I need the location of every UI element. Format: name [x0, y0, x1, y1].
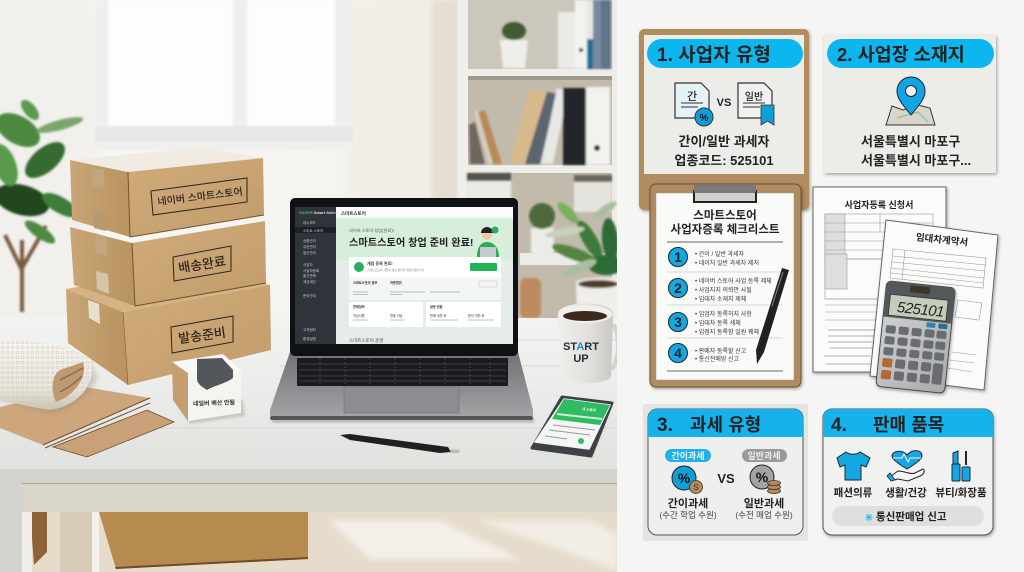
small product box: 네일버 배산 안될 — [193, 398, 235, 408]
bottom section heading: 스마트스토어 운영 — [349, 337, 383, 344]
scene: office desk photo — [0, 0, 624, 572]
START UP mug — [558, 304, 618, 384]
text: address: 서울특별시 마포구 — [861, 134, 960, 149]
label: 배송완료: 배송완료 — [177, 253, 227, 276]
item: fashion — [834, 452, 873, 499]
heading: 4. — [831, 415, 847, 436]
label: 발송준비 — [171, 316, 233, 353]
step 1: • 간이 / 일반 과세자 — [695, 250, 745, 258]
step 4: • 판매자 동록할 신고 — [695, 347, 747, 355]
text: type and code: 업종코드: 525101 — [674, 153, 774, 168]
general tax option: (수전 매업 수원) — [735, 510, 793, 520]
summary cards: 문의 개월 후 — [468, 313, 485, 318]
hero heading: 스마트스토어 창업 준비 완료! — [349, 236, 473, 249]
label: 배송완료 — [173, 246, 231, 281]
smartphone: 내 스토어 — [582, 406, 596, 413]
binders top shelf — [558, 0, 611, 69]
step 1: 1 — [674, 249, 682, 265]
status card: 개업 등록 완료! — [367, 260, 393, 266]
status card — [349, 257, 501, 300]
laptop base — [270, 352, 534, 423]
item: fashion: 패션의류 — [834, 486, 873, 499]
note pill: 통신판매업 신고 — [876, 510, 947, 523]
calculator: 525101 — [896, 299, 945, 321]
step 2 — [668, 277, 772, 303]
panel 3: tax type: VS — [717, 471, 735, 486]
step 3: 3 — [674, 314, 682, 330]
step 3: • 임대차 동록 세체 — [695, 319, 741, 327]
keypad — [881, 318, 948, 385]
general tax option: % — [756, 469, 769, 485]
step 2: • 네이버 스토어 사업 등록 제체 — [695, 277, 772, 285]
icon: pen — [756, 268, 789, 364]
right background — [617, 0, 1024, 572]
heading — [648, 409, 803, 437]
bottom box — [66, 266, 271, 385]
sidebar: 주문관리 — [303, 244, 316, 249]
heading: 3. — [657, 415, 673, 436]
step 4 — [668, 344, 747, 363]
heading pill — [827, 39, 994, 68]
top box — [70, 147, 264, 237]
sidebar: NAVER Smart Seller — [299, 210, 338, 215]
simplified tax option: (수간 학업 수원) — [659, 510, 717, 520]
heading — [823, 409, 993, 437]
general tax option — [735, 449, 793, 520]
flat cardboard sheets — [0, 387, 174, 457]
clip — [694, 185, 756, 202]
step 4: 4 — [674, 345, 682, 361]
heading pill — [647, 39, 803, 68]
summary cards: 허남사항 — [353, 313, 365, 318]
label: 네이버 스마트스토어 — [151, 178, 247, 215]
hero heading — [349, 227, 473, 249]
small plant low shelf — [529, 203, 555, 254]
small product box — [172, 354, 245, 424]
summary cards: 판매정보 — [353, 304, 365, 309]
text: address — [861, 134, 971, 168]
text: type and code: 간이/일반 과세자 — [679, 134, 770, 149]
step 3 — [668, 310, 759, 336]
window — [95, 0, 353, 150]
laptop — [270, 198, 534, 423]
top bar title: 스마트스토어 — [341, 210, 366, 217]
general tax option: 일반과세 — [744, 496, 784, 510]
step 1: • 네이처 일반 과세자 제처 — [695, 259, 759, 267]
icon: tax documents: VS — [717, 97, 731, 109]
item: beauty — [935, 451, 987, 499]
item: beauty: 뷰티/화장품 — [935, 486, 987, 499]
pen on desk — [340, 434, 460, 453]
checklist title — [670, 209, 780, 236]
sidebar: 통신판매 — [303, 273, 316, 278]
step 2: • 임대차 소재지 제체 — [695, 295, 746, 303]
sidebar: 문의관리 — [303, 293, 316, 298]
bubble wrap roll — [0, 340, 97, 413]
step 4: • 통신전매망 신고 — [695, 355, 740, 363]
left plant — [0, 97, 84, 312]
floor — [0, 512, 617, 572]
panel 2: business address — [824, 35, 996, 173]
item: health: 생활/건강 — [885, 486, 927, 499]
heading pill: 2. 사업장 소재지 — [837, 44, 965, 65]
simplified tax option: 간이과세 — [668, 496, 708, 510]
note pill — [832, 506, 984, 526]
summary cards: 활동 현황 — [430, 304, 443, 309]
document: lease contract — [870, 220, 998, 390]
middle box — [70, 221, 266, 306]
sidebar: 상품관리 — [303, 238, 316, 243]
table edge — [0, 469, 617, 483]
character illustration — [477, 226, 499, 258]
step 1 — [668, 248, 759, 267]
sidebar: 스마트 스토어 — [303, 228, 323, 233]
icon: tax documents: % — [700, 113, 709, 124]
status card: 허용범위 — [390, 280, 402, 285]
summary cards: 판매 개월 후 — [430, 313, 447, 318]
box under table — [30, 512, 308, 569]
books middle shelf — [469, 87, 610, 165]
START UP mug: UP — [573, 353, 589, 365]
step 2: • 사업지지 의뢰만 사될 — [695, 286, 752, 294]
note pill: ✳ — [865, 513, 874, 524]
contract table — [890, 249, 986, 372]
label: 네이버 스마트스토어: 네이버 스마트스토어 — [157, 186, 243, 208]
simplified tax option: % — [678, 470, 691, 486]
icon: tax documents: 간 — [687, 90, 697, 103]
general tax option: 일반과세 — [747, 450, 781, 461]
step 2: 2 — [674, 280, 682, 296]
heading: 과세 유형 — [690, 415, 761, 435]
back wall and curtains — [0, 0, 617, 572]
icon: tax documents: 일반 — [745, 90, 763, 103]
simplified tax option: 간이과세 — [671, 450, 705, 461]
form table — [825, 214, 933, 320]
item: health — [885, 451, 927, 499]
sidebar: 세금계산 — [303, 279, 317, 284]
document: business registration form — [813, 187, 946, 372]
step 3: • 입업자 동록허지 사항 — [695, 310, 752, 318]
panel 3: tax type — [643, 404, 808, 541]
smartphone — [532, 397, 612, 457]
panel 1: business type — [639, 29, 809, 210]
START UP mug: START — [563, 341, 599, 353]
icon: tax documents — [675, 83, 774, 126]
icon: map pin — [886, 77, 935, 125]
potted plant on top shelf — [500, 22, 528, 68]
right plant — [545, 199, 624, 318]
laptop screen — [290, 198, 518, 356]
sidebar: 정산관리 — [303, 250, 316, 255]
summary cards: 활동 이상 — [390, 313, 403, 318]
panel 4: sales items — [823, 409, 993, 535]
document: business registration form: 사업자등록 신청서 — [845, 199, 913, 210]
hero heading: 네이버 스토어 창업(완료)! — [349, 227, 394, 234]
sidebar — [295, 210, 338, 341]
text: address: 서울특별시 마포구... — [861, 153, 971, 168]
table apron and legs — [0, 483, 617, 572]
label: 발송준비: 발송준비 — [177, 325, 227, 346]
boxes low shelf — [467, 173, 612, 212]
sidebar: 환경설정 — [303, 336, 316, 341]
sidebar: 사업자등록 — [303, 268, 320, 273]
table top — [0, 318, 617, 483]
heading: 판매 품목 — [873, 415, 944, 435]
step 3: • 입점지 동록함 일원 꿰체 — [695, 328, 759, 336]
clipboard checklist — [650, 184, 801, 387]
cardboard box stack — [66, 147, 271, 385]
document: lease contract: 임대차계약서 — [915, 231, 969, 249]
status card: 스마트스토어 정보 — [353, 280, 377, 285]
sidebar: 대시보드 — [303, 220, 317, 225]
bookshelf — [458, 0, 617, 318]
simplified tax option — [659, 449, 717, 520]
heading pill: 1. 사업자 유형 — [657, 44, 771, 66]
checklist title: 스마트스토어 — [693, 209, 757, 222]
status card: 스마트스토어 사업자 정보 확인이 완료되었습니다 — [367, 268, 425, 272]
sidebar: 사업자 — [303, 262, 313, 267]
sidebar: 고객센터 — [303, 327, 316, 332]
summary cards — [349, 302, 501, 327]
checklist title: 사업자증록 체크리스트 — [670, 223, 780, 236]
text: type and code — [674, 134, 774, 168]
simplified tax option: S — [693, 483, 699, 492]
calculator — [876, 281, 955, 393]
